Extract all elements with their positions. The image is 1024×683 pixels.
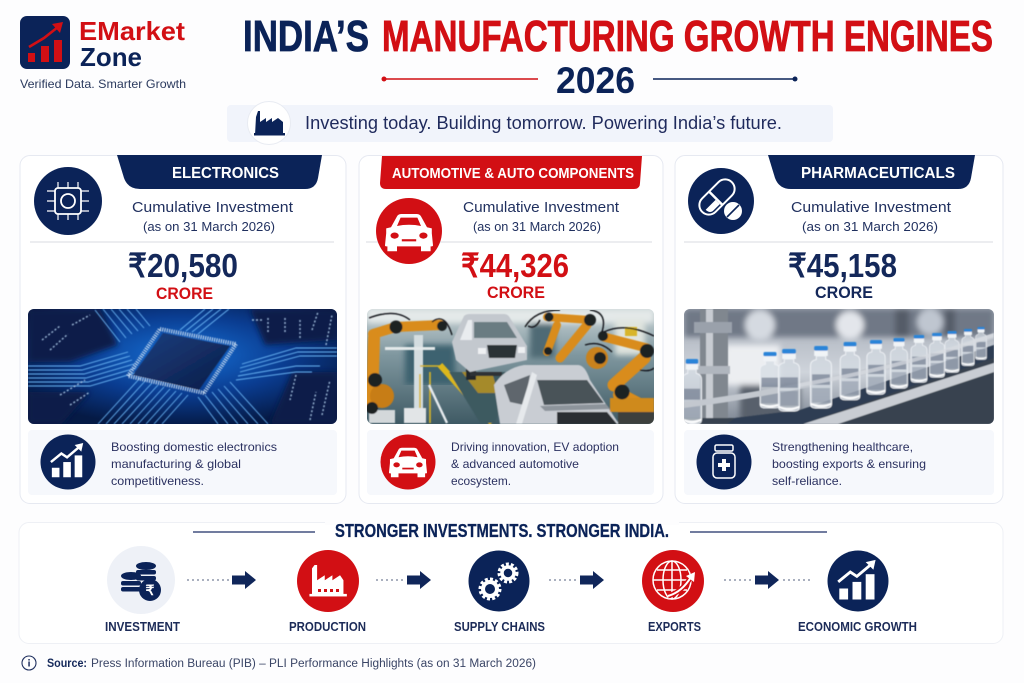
step: investment — [105, 546, 180, 634]
investment label — [463, 200, 619, 234]
investment label — [132, 200, 293, 234]
text box: pharmaceuticals — [684, 430, 994, 495]
investment label — [791, 200, 951, 234]
tagline bar — [227, 102, 833, 144]
value — [461, 247, 569, 302]
value: ₹44,326 — [461, 247, 569, 284]
title: 2026 — [556, 60, 635, 101]
chain heading: STRONGER INVESTMENTS. STRONGER INDIA. — [335, 521, 669, 541]
icon: chip — [34, 167, 102, 235]
title — [243, 12, 993, 101]
text box: automotive: Driving innovation, EV adoption — [451, 440, 619, 454]
icon: pills — [688, 168, 754, 234]
icon: growth chart — [40, 434, 96, 490]
electronics tab — [117, 155, 322, 189]
text box: automotive: & advanced automotive — [451, 457, 579, 471]
value: ₹45,158 — [788, 247, 897, 284]
step: exports: EXPORTS — [648, 620, 701, 634]
step: investment: INVESTMENT — [105, 620, 180, 634]
chain heading — [193, 520, 827, 541]
image: circuit board — [28, 309, 337, 424]
panel: value chain — [19, 520, 1003, 644]
text box: electronics — [28, 430, 337, 495]
image: car assembly line — [366, 309, 654, 424]
pharmaceuticals tab: PHARMACEUTICALS — [801, 165, 955, 182]
step: investment: ₹ — [146, 582, 155, 598]
automotive tab: AUTOMOTIVE & AUTO COMPONENTS — [392, 165, 634, 182]
image: vial production line — [682, 309, 994, 424]
value: CRORE — [156, 284, 213, 303]
text box: automotive — [367, 430, 654, 495]
icon: medicine bottle — [696, 434, 752, 490]
source note: Press Information Bureau (PIB) – PLI Performance Highlights (as on 31 March 2026) — [91, 658, 536, 670]
value: CRORE — [487, 283, 545, 302]
investment label: Cumulative Investment — [791, 200, 951, 216]
step: supply chains — [454, 550, 545, 634]
value — [128, 247, 238, 303]
investment label: (as on 31 March 2026) — [143, 219, 275, 234]
step: production — [289, 550, 366, 634]
panel: automotive — [359, 156, 663, 504]
investment label: Cumulative Investment — [463, 200, 619, 216]
arrow — [549, 571, 604, 589]
value — [788, 247, 897, 302]
car one — [452, 314, 527, 376]
tagline bar: Investing today. Building tomorrow. Powering India’s future. — [305, 113, 782, 133]
arrow — [376, 571, 431, 589]
title: INDIA’S — [243, 12, 369, 61]
icon: car — [376, 198, 442, 264]
pharmaceuticals tab — [768, 155, 975, 189]
step: production: PRODUCTION — [289, 620, 366, 634]
text box: pharmaceuticals: Strengthening healthcare, — [772, 440, 913, 454]
investment label: Cumulative Investment — [132, 200, 293, 216]
text box: pharmaceuticals: self-reliance. — [772, 474, 842, 488]
text box: electronics: manufacturing & global — [111, 457, 241, 471]
text box: pharmaceuticals: boosting exports & ensuring — [772, 457, 926, 471]
value: ₹20,580 — [128, 247, 238, 284]
logo: EMarket — [79, 16, 185, 46]
investment label: (as on 31 March 2026) — [802, 219, 938, 234]
text box: automotive: ecosystem. — [451, 474, 511, 488]
logo: Verified Data. Smarter Growth — [20, 77, 186, 91]
step: supply chains: SUPPLY CHAINS — [454, 620, 545, 634]
investment label: (as on 31 March 2026) — [473, 219, 601, 234]
logo — [20, 16, 186, 91]
arrow — [187, 571, 256, 589]
car two — [494, 365, 619, 424]
text box: electronics: Boosting domestic electronics — [111, 440, 277, 454]
electronics tab: ELECTRONICS — [172, 165, 279, 182]
logo: Zone — [80, 42, 142, 72]
source note: Source: — [47, 658, 87, 670]
step: economic growth: ECONOMIC GROWTH — [798, 620, 917, 634]
value: CRORE — [815, 283, 873, 302]
panel: pharmaceuticals — [675, 155, 1003, 504]
arrow — [724, 571, 813, 589]
icon: car — [380, 434, 436, 490]
text box: electronics: competitiveness. — [111, 474, 204, 488]
step: economic growth — [798, 550, 917, 634]
step: exports — [642, 550, 704, 634]
panel: electronics — [20, 155, 346, 504]
automotive tab — [380, 156, 642, 189]
